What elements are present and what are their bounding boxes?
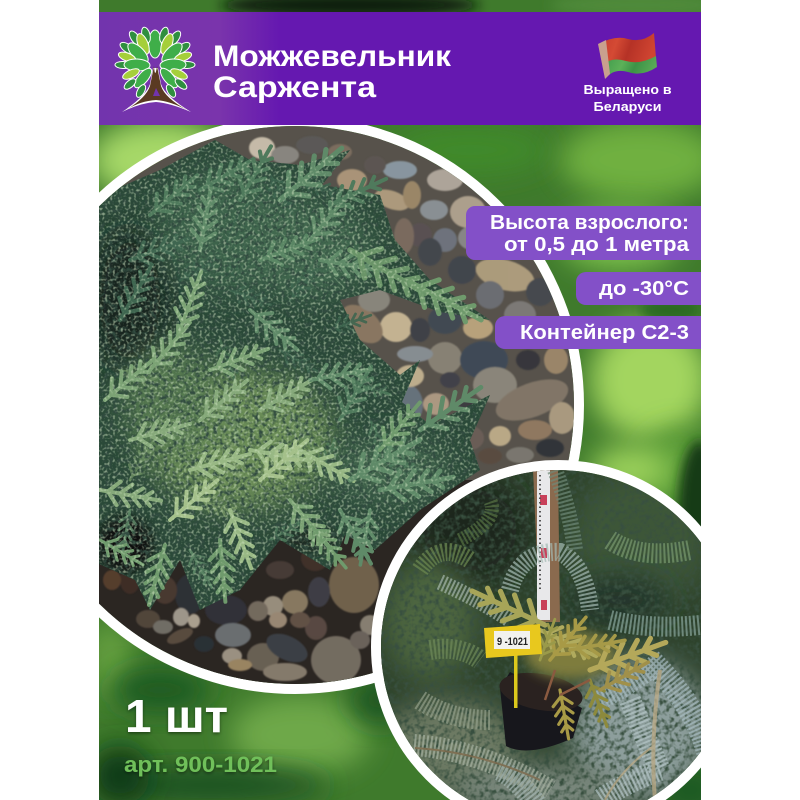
juniper foliage mass xyxy=(99,140,490,610)
text: grown in Belarus: Беларуси xyxy=(594,99,662,114)
callout: container size xyxy=(495,316,711,349)
photo ring xyxy=(376,465,740,800)
callout: mature height xyxy=(466,206,711,260)
callout: container size: Контейнер С2-3 xyxy=(520,322,689,344)
golden juniper sprigs xyxy=(465,577,671,741)
foliage texture xyxy=(99,146,488,602)
panel: purple header band xyxy=(99,12,701,125)
juniper sprigs: fine under-layer xyxy=(114,164,423,592)
text: quantity: 1 шт xyxy=(125,690,228,742)
callout: frost hardiness xyxy=(576,272,711,305)
photo ring xyxy=(99,125,584,694)
callout: mature height: от 0,5 до 1 метра xyxy=(504,234,690,256)
callout: mature height: Высота взрослого: xyxy=(490,212,689,234)
pebbles lower xyxy=(103,545,380,684)
plant pot xyxy=(500,672,582,750)
pebbles upper right xyxy=(249,136,575,464)
title: Можжевельник xyxy=(213,40,452,73)
spruce branches xyxy=(414,470,710,800)
measuring stick xyxy=(533,468,560,622)
title xyxy=(213,40,452,104)
panel: large round photo of juniper on pebbles xyxy=(99,125,584,694)
text: grown in Belarus xyxy=(584,82,672,114)
icon: tree logo xyxy=(115,26,195,112)
callout: frost hardiness: до -30°C xyxy=(599,278,689,300)
foliage highlights xyxy=(99,140,490,610)
text: grown in Belarus: Выращено в xyxy=(584,82,672,97)
yellow plant label: 9 -1021 xyxy=(497,636,528,648)
panel: small round photo of plant in pot xyxy=(371,460,701,800)
text: article number: арт. 900-1021 xyxy=(124,752,277,777)
title: Саржента xyxy=(213,71,376,104)
yellow plant label xyxy=(484,624,542,708)
icon: flag of Belarus xyxy=(598,33,657,79)
juniper sprigs xyxy=(95,136,489,608)
